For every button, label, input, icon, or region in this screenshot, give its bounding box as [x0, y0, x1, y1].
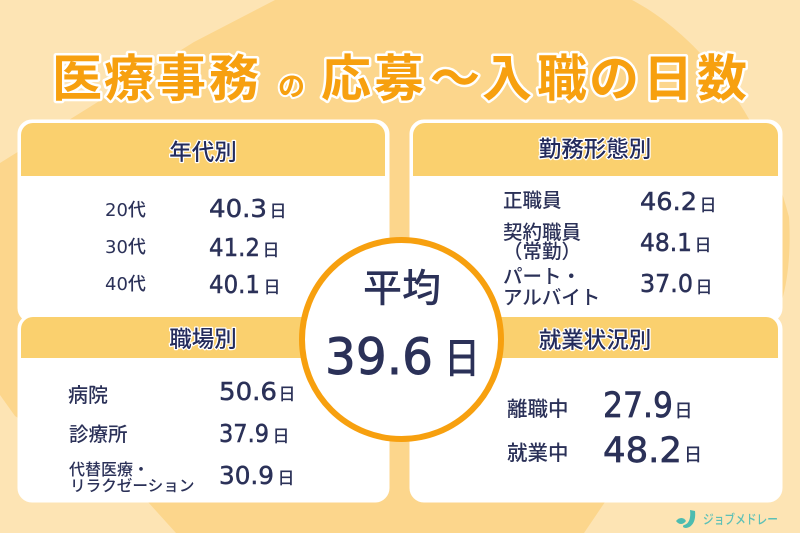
- panel: by employment status: [411, 316, 781, 501]
- row: 40s: 40.1: [209, 270, 260, 299]
- row: clinic: 日: [272, 422, 290, 447]
- row: 40s: 40代: [105, 274, 146, 295]
- row: contract staff: 48.1: [640, 228, 692, 257]
- logo wordmark: ジョブメドレー: [703, 509, 778, 528]
- panel: by workplace: [19, 316, 388, 501]
- row: hospital: 病院: [68, 383, 108, 407]
- row: 40s: 日: [264, 273, 280, 298]
- row: part-time: 37.0: [640, 269, 693, 298]
- heading: by age: 年代別: [169, 135, 237, 167]
- title: 応募～入職の日数: [321, 39, 747, 111]
- row: employed: [507, 431, 702, 471]
- row: between jobs: 日: [674, 397, 692, 423]
- heading: by employment status: 就業状況別: [539, 323, 651, 355]
- label: average: 平均: [363, 258, 441, 314]
- icon: logo mark: [676, 510, 695, 528]
- row: between jobs: [507, 386, 692, 426]
- panel: by age: [19, 121, 388, 321]
- panel: by employment type: [411, 121, 781, 321]
- row: between jobs: 離職中: [507, 397, 568, 421]
- row: full-time: 日: [700, 191, 716, 216]
- value: 39.6 days: [325, 325, 480, 386]
- title: 医療事務: [52, 39, 259, 111]
- row: 20s: [105, 194, 286, 223]
- row: 20s: 20代: [105, 200, 146, 221]
- row: employed: 就業中: [507, 441, 568, 465]
- row: full-time: [503, 187, 716, 216]
- row: full-time: 46.2: [640, 187, 697, 216]
- row: between jobs: 27.9: [603, 386, 673, 426]
- row: 20s: 40.3: [209, 194, 267, 223]
- center circle: overall average: [302, 240, 501, 439]
- row: alternative medicine: リラクゼーション: [70, 477, 194, 495]
- row: hospital: 日: [278, 380, 296, 405]
- title: [52, 39, 747, 111]
- row: alternative medicine: 代替医療・: [69, 460, 149, 479]
- row: hospital: [68, 377, 296, 407]
- title: の: [278, 65, 305, 104]
- row: alternative medicine: [69, 460, 294, 495]
- row: part-time: 日: [696, 273, 712, 298]
- logo: job-medley: [676, 509, 778, 528]
- row: alternative medicine: 日: [278, 464, 294, 489]
- row: 30s: 日: [262, 236, 280, 261]
- row: contract staff: [503, 221, 712, 263]
- heading: by workplace: 職場別: [169, 322, 237, 354]
- row: part-time: パート・: [503, 265, 581, 288]
- row: employed: 48.2: [603, 431, 682, 471]
- row: hospital: 50.6: [219, 377, 277, 406]
- row: clinic: 37.9: [219, 419, 269, 448]
- row: employed: 日: [684, 441, 702, 467]
- row: contract staff: 契約職員: [503, 221, 581, 244]
- row: 30s: 41.2: [209, 233, 260, 262]
- row: alternative medicine: 30.9: [219, 461, 274, 490]
- row: contract staff: 日: [694, 231, 712, 256]
- row: clinic: [69, 419, 290, 448]
- row: clinic: 診療所: [69, 423, 128, 446]
- heading: by employment type: 勤務形態別: [539, 132, 651, 164]
- value: 39.6 days: 日: [444, 325, 480, 386]
- row: contract staff: （常勤）: [503, 240, 581, 263]
- row: part-time: アルバイト: [503, 286, 600, 309]
- value: 39.6 days: 39.6: [325, 328, 433, 386]
- row: 20s: 日: [270, 197, 286, 222]
- row: 30s: [105, 233, 280, 262]
- row: 40s: [105, 270, 280, 299]
- row: part-time: [503, 265, 712, 309]
- row: 30s: 30代: [105, 237, 146, 258]
- row: full-time: 正職員: [503, 189, 562, 212]
